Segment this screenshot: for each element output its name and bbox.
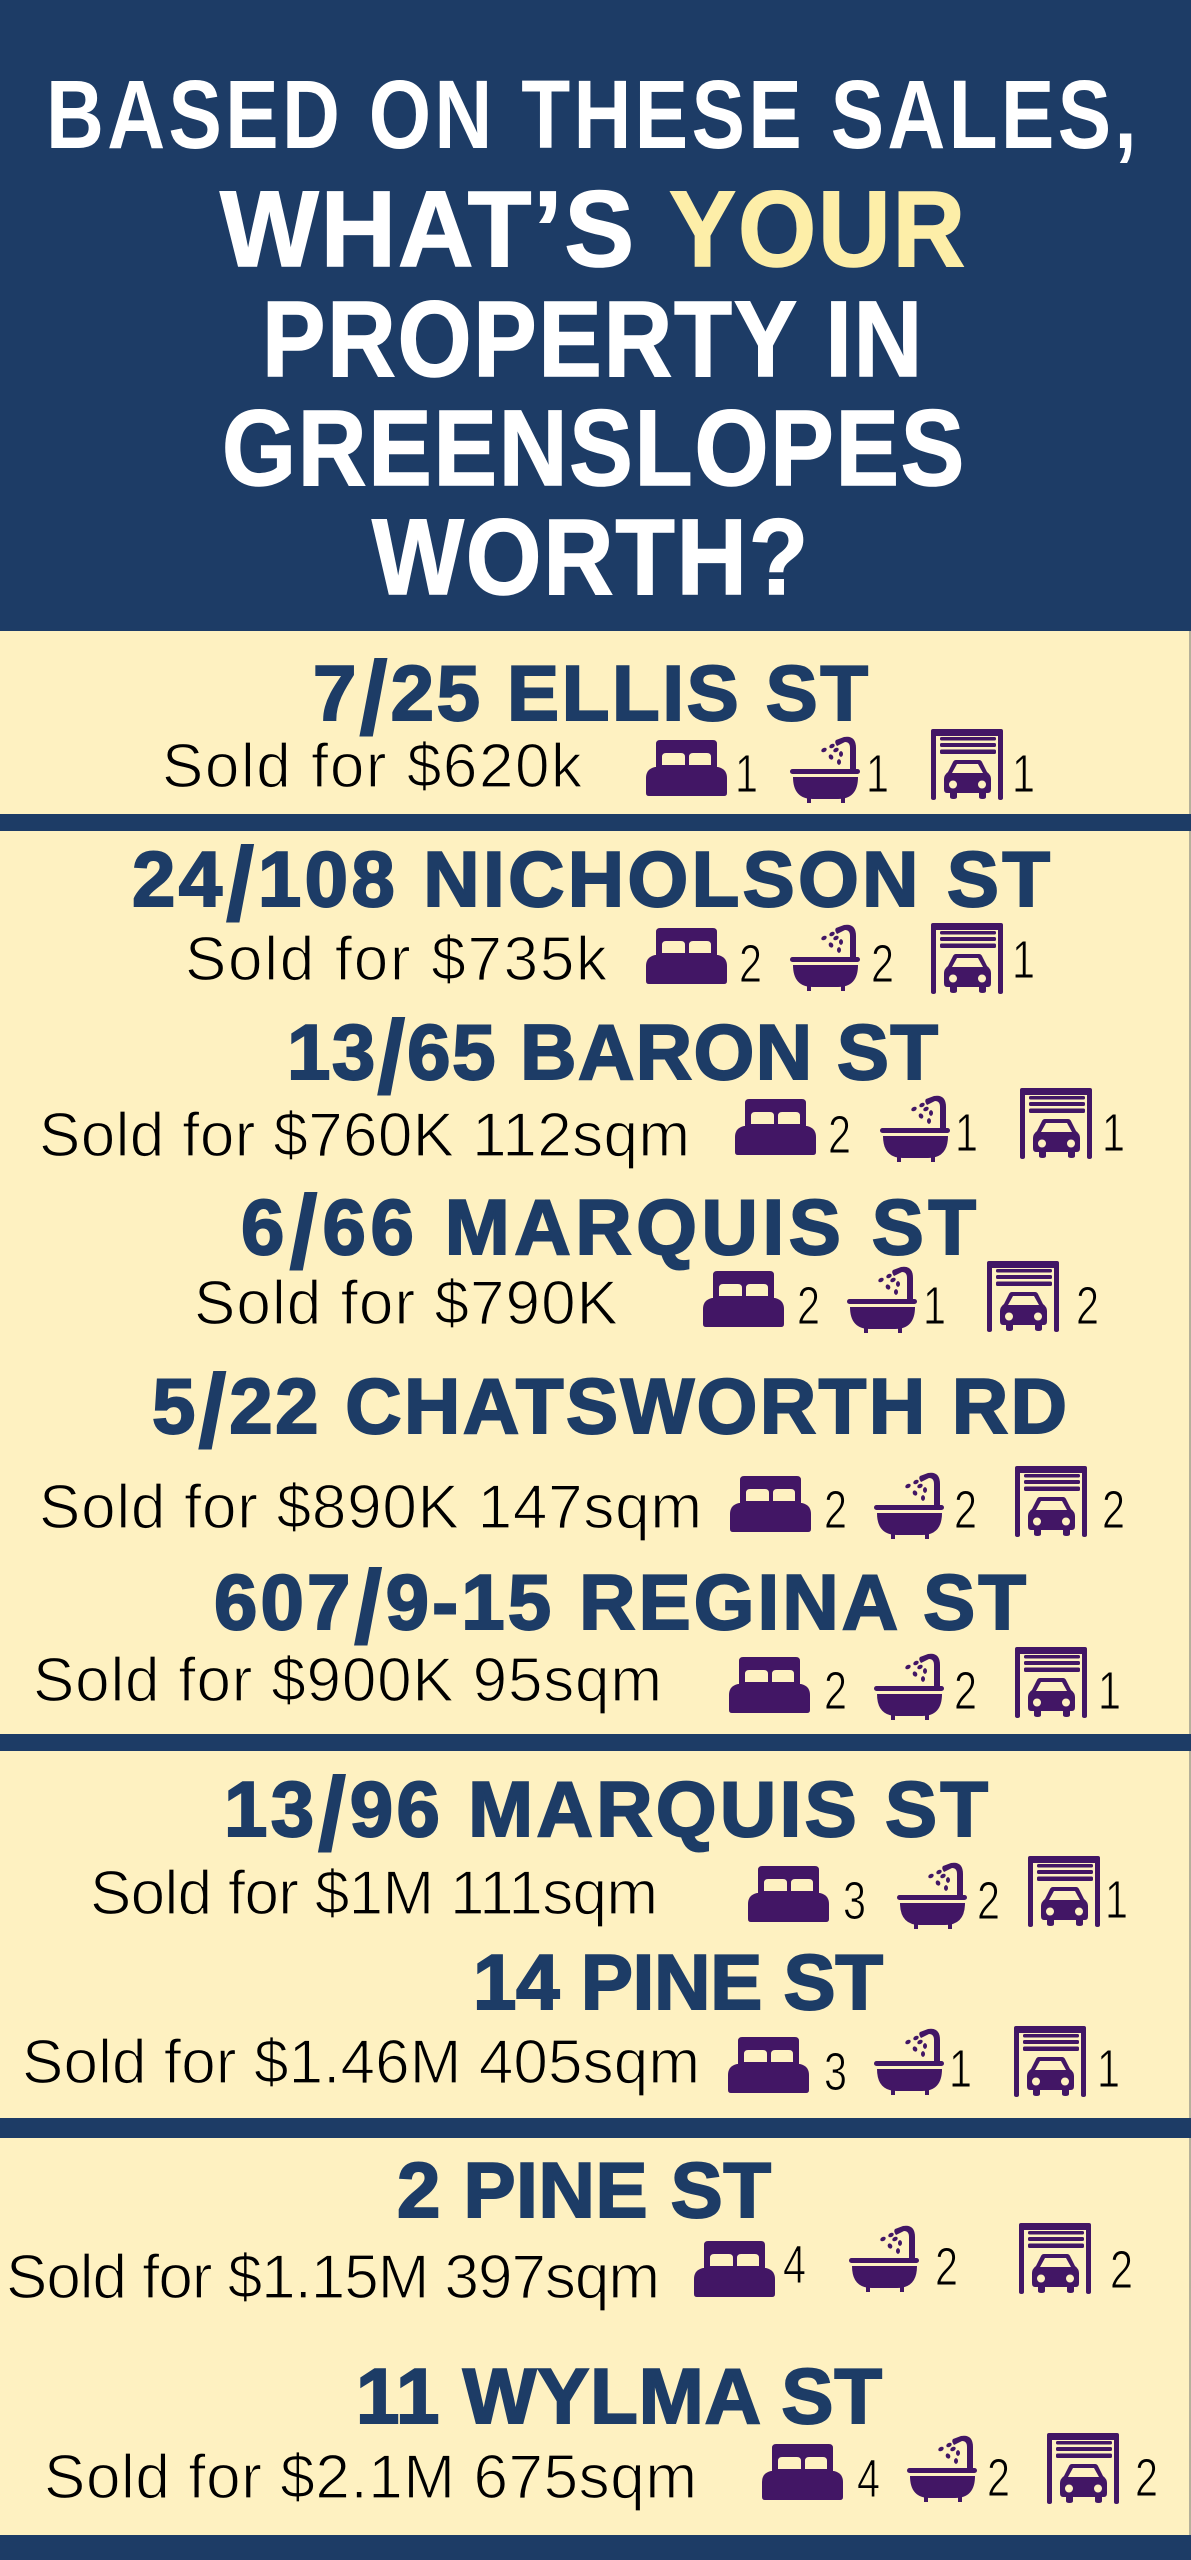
bedroom count: 3 — [843, 1871, 866, 1931]
sale price: Sold for $620k — [162, 732, 583, 801]
bedroom count: 2 — [824, 1661, 847, 1721]
footer band — [0, 2535, 1191, 2560]
garage count: 2 — [1110, 2240, 1133, 2300]
listing: 607/9-15 Regina St — [33, 1550, 1121, 1721]
address: / — [359, 641, 388, 757]
listing: 13/65 Baron St — [39, 1000, 1125, 1170]
address: / — [377, 1000, 406, 1116]
heading line: what's: WHAT’S — [220, 168, 636, 289]
sale price: Sold for $735k — [185, 925, 608, 994]
listing: 2 Pine St — [6, 2146, 1133, 2312]
address: 22 CHATSWORTH RD — [229, 1362, 1067, 1450]
address: 7 — [313, 649, 356, 737]
bathroom count: 1 — [866, 744, 889, 804]
icon: bed — [748, 1866, 829, 1922]
sale price: Sold for $760K 112sqm — [39, 1101, 690, 1170]
garage count: 1 — [1102, 1103, 1125, 1163]
bedroom count: 2 — [828, 1105, 851, 1165]
icon: bed — [762, 2444, 843, 2500]
bedroom count: 2 — [739, 934, 762, 994]
address: / — [317, 1757, 346, 1873]
icon: bed — [694, 2241, 775, 2297]
sale price: Sold for $890K 147sqm — [39, 1473, 702, 1542]
heading line: property in: PROPERTY IN — [262, 278, 924, 399]
address: / — [289, 1175, 318, 1291]
panel: header — [0, 0, 1191, 631]
sale price: Sold for $900K 95sqm — [33, 1646, 662, 1715]
icon: garage — [1015, 1647, 1087, 1718]
heading line: worth: WORTH? — [372, 496, 810, 617]
bathroom count: 2 — [987, 2448, 1010, 2508]
bathroom count: 2 — [954, 1661, 977, 1721]
bathroom count: 2 — [954, 1480, 977, 1540]
address: 13 — [224, 1765, 314, 1853]
divider band 3 — [0, 2118, 1191, 2138]
bathroom count: 1 — [955, 1103, 978, 1163]
listing: 6/66 Marquis St — [194, 1175, 1099, 1338]
icon: bath — [790, 925, 860, 991]
bedroom count: 2 — [797, 1276, 820, 1336]
bedroom count: 4 — [783, 2235, 806, 2295]
garage count: 1 — [1105, 1870, 1128, 1930]
bedroom count: 3 — [824, 2042, 847, 2102]
heading word: your highlighted: YOUR — [669, 168, 967, 289]
listing: 11 Wylma St — [44, 2352, 1158, 2512]
icon: bath — [790, 737, 860, 803]
address: 24 — [132, 835, 222, 923]
icon: bath — [874, 1473, 944, 1539]
sale price: Sold for $1.15M 397sqm — [6, 2243, 660, 2312]
icon: bath — [874, 1654, 944, 1720]
bathroom count: 2 — [935, 2237, 958, 2297]
address: 96 MARQUIS ST — [350, 1765, 988, 1853]
divider band 1 — [0, 814, 1191, 831]
icon: garage — [1019, 2223, 1091, 2294]
icon: bath — [847, 1267, 917, 1333]
icon: bed — [728, 2037, 809, 2093]
icon: bed — [730, 1476, 811, 1532]
address: / — [226, 827, 254, 943]
bathroom count: 2 — [977, 1871, 1000, 1931]
icon: bath — [897, 1863, 967, 1929]
bedroom count: 1 — [735, 744, 758, 804]
sale price: Sold for $1.46M 405sqm — [22, 2028, 700, 2097]
icon: garage — [1020, 1088, 1092, 1159]
icon: bath — [880, 1096, 950, 1162]
address: 14 PINE ST — [473, 1938, 883, 2026]
icon: garage — [931, 923, 1003, 994]
icon: bed — [703, 1271, 784, 1327]
listing: 7/25 Ellis St — [162, 641, 1035, 804]
icon: bed — [729, 1657, 810, 1713]
listing: 24/108 Nicholson St — [132, 827, 1050, 994]
sale price: Sold for $1M 111sqm — [90, 1859, 658, 1928]
listing: 13/96 Marquis St — [90, 1757, 1128, 1931]
garage count: 2 — [1135, 2448, 1158, 2508]
divider band 2 — [0, 1734, 1191, 1751]
icon: bath — [849, 2226, 919, 2292]
address: 11 WYLMA ST — [356, 2352, 882, 2440]
address: 66 MARQUIS ST — [323, 1183, 976, 1271]
bathroom count: 1 — [923, 1276, 946, 1336]
sale price: Sold for $790K — [194, 1269, 618, 1338]
listing: 14 Pine St — [22, 1938, 1120, 2102]
icon: bed — [646, 928, 727, 984]
icon: garage — [1014, 2026, 1086, 2097]
address: 9-15 REGINA ST — [386, 1558, 1026, 1646]
icon: garage — [1047, 2433, 1119, 2504]
bedroom count: 4 — [857, 2449, 880, 2509]
address: / — [354, 1550, 382, 1666]
address: 6 — [241, 1183, 284, 1271]
garage count: 2 — [1102, 1480, 1125, 1540]
garage count: 1 — [1098, 1661, 1121, 1721]
garage count: 1 — [1012, 744, 1035, 804]
bedroom count: 2 — [824, 1480, 847, 1540]
listing: 5/22 Chatsworth Rd — [39, 1354, 1125, 1542]
garage count: 1 — [1012, 930, 1035, 990]
sale price: Sold for $2.1M 675sqm — [44, 2443, 697, 2512]
icon: bath — [907, 2436, 977, 2502]
bathroom count: 2 — [871, 934, 894, 994]
address: / — [198, 1354, 227, 1470]
icon: garage — [1015, 1466, 1087, 1537]
icon: garage — [987, 1261, 1059, 1332]
garage count: 2 — [1076, 1276, 1099, 1336]
address: 65 BARON ST — [407, 1008, 938, 1096]
heading line: greenslopes: GREENSLOPES — [222, 387, 966, 508]
address: 5 — [152, 1362, 195, 1450]
address: 2 PINE ST — [397, 2146, 771, 2234]
address: 13 — [287, 1008, 375, 1096]
garage count: 1 — [1097, 2039, 1120, 2099]
address: 108 NICHOLSON ST — [258, 835, 1050, 923]
address: 607 — [214, 1558, 350, 1646]
icon: garage — [931, 729, 1003, 800]
icon: bath — [874, 2029, 944, 2095]
bathroom count: 1 — [949, 2039, 972, 2099]
icon: bed — [735, 1099, 816, 1155]
icon: bed — [646, 740, 727, 796]
icon: garage — [1028, 1856, 1100, 1927]
address: 25 ELLIS ST — [391, 649, 868, 737]
